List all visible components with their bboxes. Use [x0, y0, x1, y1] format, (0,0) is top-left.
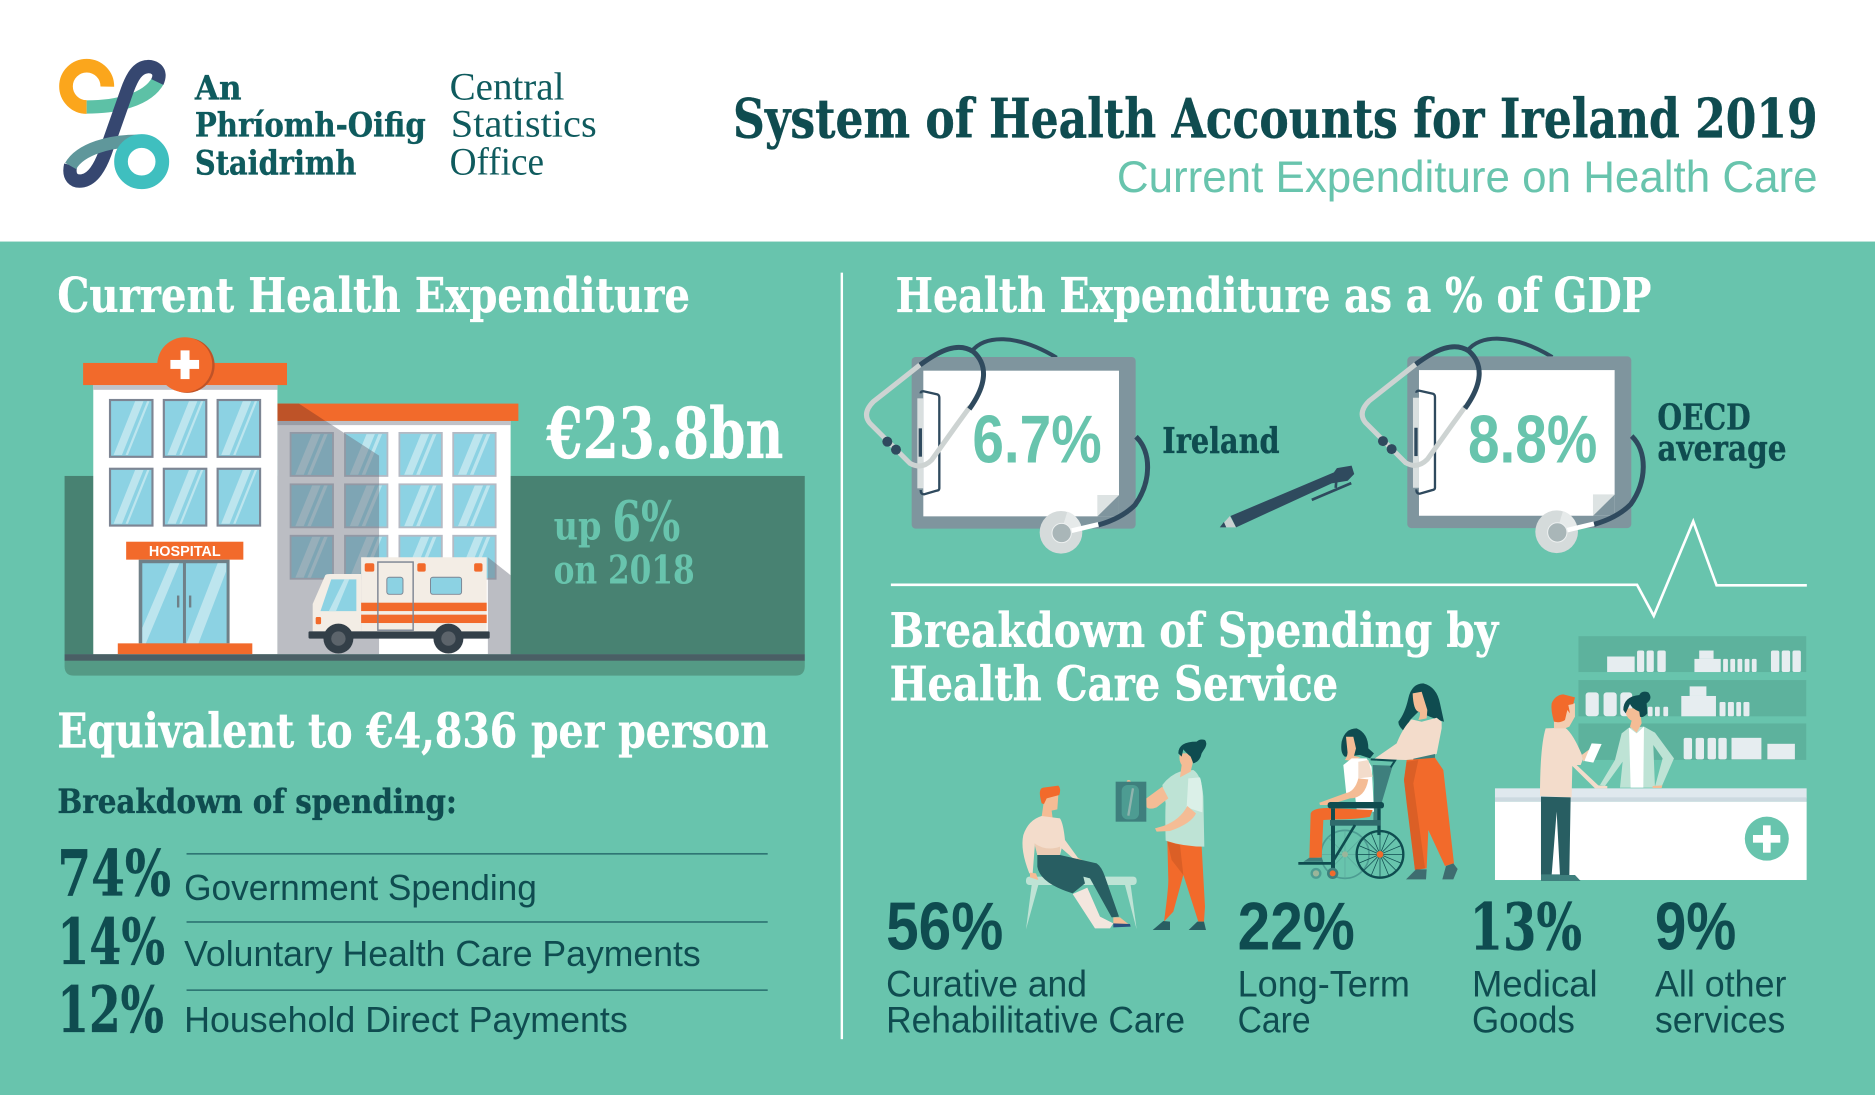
- heading: Current Health Expenditure: Current Health Expenditure: [57, 268, 690, 324]
- stat: medical goods: [1470, 889, 1598, 1041]
- heading: Breakdown of Spending by Health Care Service: Health Care Service: [890, 657, 1338, 713]
- label: OECD average: OECD: [1657, 396, 1751, 438]
- icon: medical cross on counter: [1745, 817, 1789, 861]
- ambulance: [309, 557, 490, 654]
- list: spending breakdown: 74%: [57, 836, 171, 911]
- pharmacist: [1600, 692, 1674, 788]
- wheelchair frame: [1298, 759, 1403, 878]
- icon: stethoscope: [1362, 347, 1643, 553]
- list: spending breakdown: 12%: [57, 972, 164, 1047]
- clipboard: Ireland 6.7%: 6.7%: [972, 402, 1102, 478]
- patient: [1022, 786, 1131, 928]
- logo text: Irish name: [194, 68, 426, 183]
- heading: Breakdown of Spending by Health Care Service: Breakdown of Spending by: [890, 603, 1500, 659]
- list: spending breakdown: Household Direct Payments: [184, 1000, 628, 1040]
- stat: long-term care: 22%: [1238, 888, 1355, 964]
- stat: total spending: €23.8bn: [546, 392, 783, 475]
- stat: long-term care: [1238, 888, 1410, 1041]
- stat: annual growth: 6%: [612, 489, 680, 554]
- stat: all other services: [1655, 888, 1787, 1041]
- figures and counter: [1495, 692, 1807, 881]
- label: OECD average: [1657, 396, 1787, 469]
- main building: [83, 337, 287, 654]
- products: [1586, 651, 1801, 759]
- stat: annual growth: [554, 489, 695, 594]
- clipboard: Ireland 6.7%: [867, 339, 1148, 554]
- heading: GDP: Health Expenditure as a % of GDP: [896, 268, 1651, 324]
- vertical divider: [841, 273, 843, 1039]
- wheelchair back wheel: [1321, 830, 1369, 878]
- stat: annual growth: on 2018: [554, 548, 695, 594]
- icon: pen: [1220, 466, 1354, 527]
- icon: stethoscope: [867, 347, 1148, 554]
- ECG line: [891, 521, 1807, 616]
- counter: [1495, 788, 1807, 880]
- stat: curative and rehabilitative care: Rehabilitative Care: [886, 999, 1185, 1041]
- stat: medical goods: Medical: [1472, 963, 1598, 1005]
- carer: [1375, 683, 1458, 879]
- list: spending breakdown: Voluntary Health Care Payments: [184, 934, 701, 974]
- illustration: pharmacy: [1495, 636, 1807, 881]
- main building: HOSPITAL: [149, 544, 221, 560]
- subtitle: Current Expenditure on Health Care: [1117, 153, 1818, 202]
- stat: long-term care: Care: [1238, 999, 1311, 1041]
- label: Ireland: Ireland: [1162, 420, 1279, 462]
- customer: [1540, 694, 1607, 881]
- stat: long-term care: Long-Term: [1238, 963, 1410, 1005]
- stat: medical goods: 13%: [1470, 889, 1582, 965]
- clipboard: OECD 8.8%: 8.8%: [1468, 402, 1597, 478]
- hospital illustration: [65, 337, 805, 676]
- white header background: [0, 0, 1875, 242]
- logo text: Irish name: Staidrimh: [195, 144, 356, 183]
- logo text: English name: Central: [450, 64, 564, 108]
- stat: curative and rehabilitative care: Curative and: [886, 963, 1087, 1005]
- logo text: English name: Office: [450, 140, 544, 184]
- clipboard: OECD 8.8%: [1362, 339, 1643, 553]
- x-ray: [1116, 780, 1146, 822]
- illustration: doctor and patient: [1022, 739, 1206, 930]
- logo text: English name: Statistics: [451, 101, 597, 145]
- second building: [277, 404, 518, 654]
- wheelchair back: [1373, 765, 1393, 822]
- stat: curative and rehabilitative care: [886, 888, 1185, 1041]
- doctor: [1146, 739, 1206, 930]
- list: spending breakdown: [57, 836, 768, 1047]
- stat: all other services: 9%: [1655, 888, 1736, 964]
- list: spending breakdown: 14%: [57, 904, 165, 979]
- shelves: [1578, 636, 1806, 760]
- stat: all other services: services: [1655, 999, 1785, 1041]
- stat: curative and rehabilitative care: 56%: [886, 888, 1003, 964]
- logo text: Irish name: An: [194, 68, 242, 107]
- stat: medical goods: Goods: [1472, 999, 1575, 1041]
- stat: all other services: All other: [1655, 963, 1787, 1005]
- seated patient: [1303, 728, 1374, 862]
- logo text: English name: [450, 64, 597, 184]
- heading: Breakdown of Spending by Health Care Service: [890, 603, 1500, 713]
- logo text: Irish name: Phríomh-Oifig: [195, 105, 426, 144]
- green main panel background: [0, 242, 1875, 1095]
- label: OECD average: average: [1657, 427, 1787, 469]
- heading: per person: Equivalent to €4,836 per person: [57, 703, 769, 759]
- illustration: wheelchair: [1298, 683, 1458, 879]
- heading: breakdown of spending: Breakdown of spending:: [57, 782, 457, 821]
- stat: annual growth: up: [554, 503, 601, 549]
- logo: CSO emblem: [66, 66, 162, 182]
- list: spending breakdown: Government Spending: [184, 868, 537, 908]
- stool: [1026, 877, 1137, 929]
